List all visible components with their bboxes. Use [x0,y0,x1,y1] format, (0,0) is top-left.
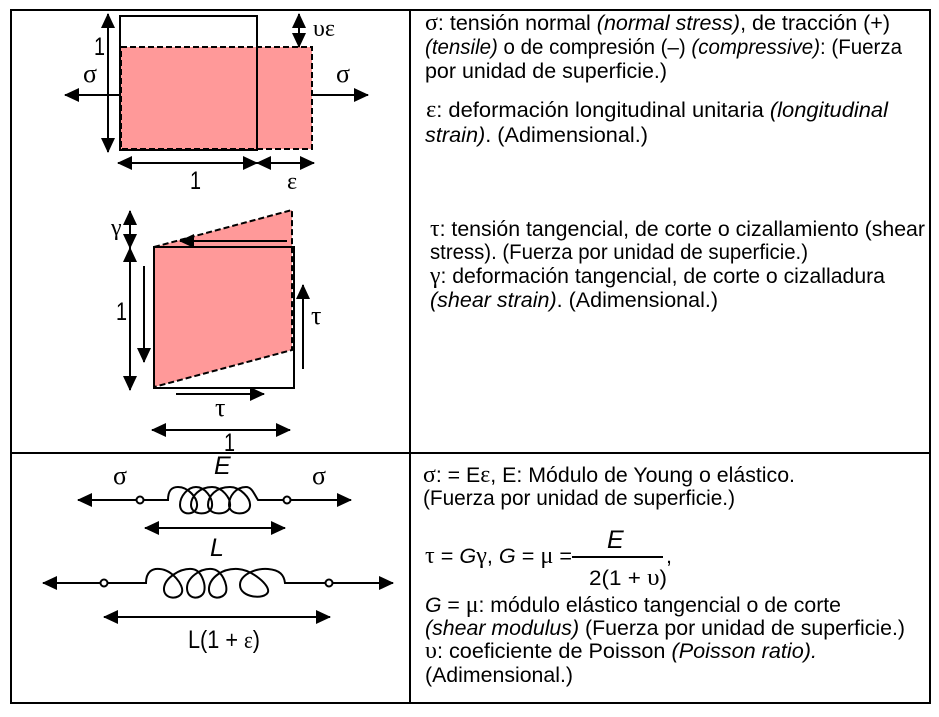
label: tau right: τ [311,301,321,330]
sheared dashed outline [154,210,292,387]
arrow: left force lower [43,582,104,584]
text block: shear modulus and Poisson: (shear modulus) (Fuerza por unidad de superficie.) [425,616,905,640]
label: 1 vertical: 1 [94,33,105,61]
label: epsilon: ε [287,169,297,195]
original square [154,247,294,388]
sheared pink shape [154,210,292,387]
label: L(1+e): L(1 + ε) [188,626,260,654]
panel: spring diagram [43,452,393,654]
formula: shear modulus: τ = Gγ, G = μ = [425,543,572,569]
label: sigma left: σ [113,461,127,490]
node right lower [326,580,332,586]
label: 1 vertical: 1 [116,298,127,326]
arrow: left force [78,499,140,501]
arrow: epsilon dimension [257,162,314,164]
text block: Young modulus: (Fuerza por unidad de superficie.) [423,486,735,510]
node right [284,496,290,504]
text block: longitudinal strain [425,97,889,147]
formula: shear modulus [425,526,672,591]
node left lower [100,580,108,586]
label: gamma: γ [110,215,122,241]
text block: Young modulus [423,462,795,510]
spring short [143,487,284,513]
arrow: sigma right [312,94,368,96]
node left [136,496,144,504]
arrow: right force lower [329,582,393,584]
arrow: vertical dimension [107,14,109,152]
text block: longitudinal strain: strain). (Adimensional.) [425,123,648,147]
label: sigma left: σ [83,59,97,88]
arrow: tau bottom [176,393,264,395]
arrow: L(1+e) dimension [104,616,330,618]
text block: shear stress: γ: deformación tangencial, de corte o cizalladura [429,263,885,289]
text block: Young modulus: σ: = Eε, E: Módulo de Young o elástico. [423,462,795,488]
label: 1 horizontal: 1 [190,167,201,195]
text block: normal stress: por unidad de superficie.) [425,59,667,83]
arrow: tau right [302,285,304,369]
label: L: L [210,534,224,562]
text block: shear modulus and Poisson: υ: coeficiente de Poisson (Poisson ratio). [425,638,817,664]
text block: shear modulus and Poisson: G = μ: módulo elástico tangencial o de corte [425,592,841,618]
label: sigma right: σ [336,59,350,88]
arrow: sigma left [65,94,120,96]
formula: shear modulus: , [666,544,672,568]
label: upsilon epsilon: υε [313,16,335,42]
text block: shear stress: (shear strain). (Adimensional.) [430,288,718,312]
arrow: E dimension [145,527,285,529]
arrow: width dimension [152,429,290,431]
panel: normal strain diagram [65,14,368,195]
arrow: width dimension [118,162,257,164]
text block: shear modulus and Poisson [425,592,905,687]
arrow: height dimension [129,248,131,390]
label: sigma right: σ [312,461,326,490]
formula: shear modulus: 2(1 + υ) [589,565,667,591]
panel: shear strain diagram [110,210,321,457]
arrow: contraction [298,14,300,47]
text block: normal stress: (tensile) o de compresión (–) (compressive): (Fuerza [425,35,902,59]
text block: shear stress: τ: tensión tangencial, de corte o cizallamiento (shear [430,216,925,242]
text block: shear modulus and Poisson: (Adimensional.) [425,663,573,687]
arrow: gamma [129,211,131,248]
text block: longitudinal strain: ε: deformación longitudinal unitaria (longitudinal [426,97,889,123]
text block: normal stress [425,10,902,83]
arrow: tau top [180,240,287,242]
arrow: right force [287,499,351,501]
text block: normal stress: σ: tensión normal (normal stress), de tracción (+) [425,10,890,36]
arrow: tau left [143,266,145,362]
formula: shear modulus: E [607,526,624,554]
label: 1 horizontal: 1 [224,429,235,457]
label: E: E [214,452,231,480]
text block: shear stress [429,216,925,312]
label: tau bottom: τ [215,393,225,422]
spring long [107,569,326,598]
original rectangle [120,16,257,150]
text block: shear stress: stress). (Fuerza por unidad de superficie.) [430,240,808,264]
deformed pink rectangle [121,47,312,149]
